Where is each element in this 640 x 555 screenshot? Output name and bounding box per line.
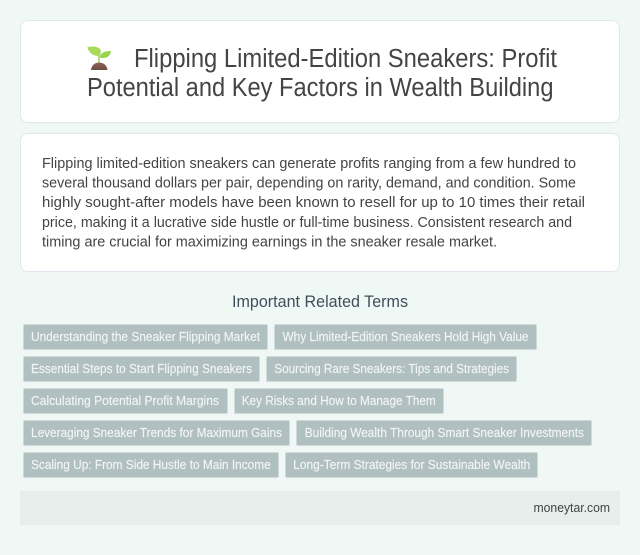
chip: Long-Term Strategies for Sustainable Wealth: [293, 458, 530, 472]
footer bar: [20, 491, 620, 525]
title text: [87, 45, 557, 102]
panel: title: [20, 20, 620, 123]
chip: [266, 356, 516, 382]
chip list: related terms: [23, 324, 592, 478]
chip: Calculating Potential Profit Margins: [31, 394, 219, 408]
chip: [296, 420, 592, 446]
chip: Key Risks and How to Manage Them: [242, 394, 436, 408]
chip: [285, 452, 538, 478]
chip: [23, 324, 268, 350]
chip: Leveraging Sneaker Trends for Maximum Gains: [31, 426, 282, 440]
chip: Scaling Up: From Side Hustle to Main Income: [31, 458, 271, 472]
icon: seedling: [87, 46, 111, 70]
chip: [234, 388, 444, 414]
chip: [274, 324, 537, 350]
chip: Essential Steps to Start Flipping Sneakers: [31, 362, 252, 376]
summary text: highly sought-after models have been known to resell for up to 10 times their retail: [42, 195, 585, 211]
panel: summary paragraph: [20, 133, 620, 272]
chip: Sourcing Rare Sneakers: Tips and Strategies: [274, 362, 509, 376]
summary text: several thousand dollars per pair, depending on rarity, demand, and condition. Some: [42, 176, 576, 192]
chip: Building Wealth Through Smart Sneaker Investments: [305, 426, 584, 440]
title text: Potential and Key Factors in Wealth Building: [87, 74, 554, 102]
footer source text: moneytar.com: [534, 501, 610, 515]
title text: Flipping Limited-Edition Sneakers: Profit: [134, 45, 557, 73]
chip: Why Limited-Edition Sneakers Hold High Value: [282, 330, 529, 344]
chip: Understanding the Sneaker Flipping Market: [31, 330, 260, 344]
summary text: Flipping limited-edition sneakers can generate profits ranging from a few hundred to: [42, 156, 576, 172]
chip: [23, 420, 290, 446]
chip: [23, 388, 228, 414]
summary text: price, making it a lucrative side hustle or full-time business. Consistent research and: [42, 215, 572, 231]
heading: related terms: Important Related Terms: [232, 293, 408, 311]
chip: [23, 356, 260, 382]
summary text: [42, 156, 585, 250]
summary text: timing are crucial for maximizing earnings in the sneaker resale market.: [42, 234, 497, 250]
chip: [23, 452, 278, 478]
